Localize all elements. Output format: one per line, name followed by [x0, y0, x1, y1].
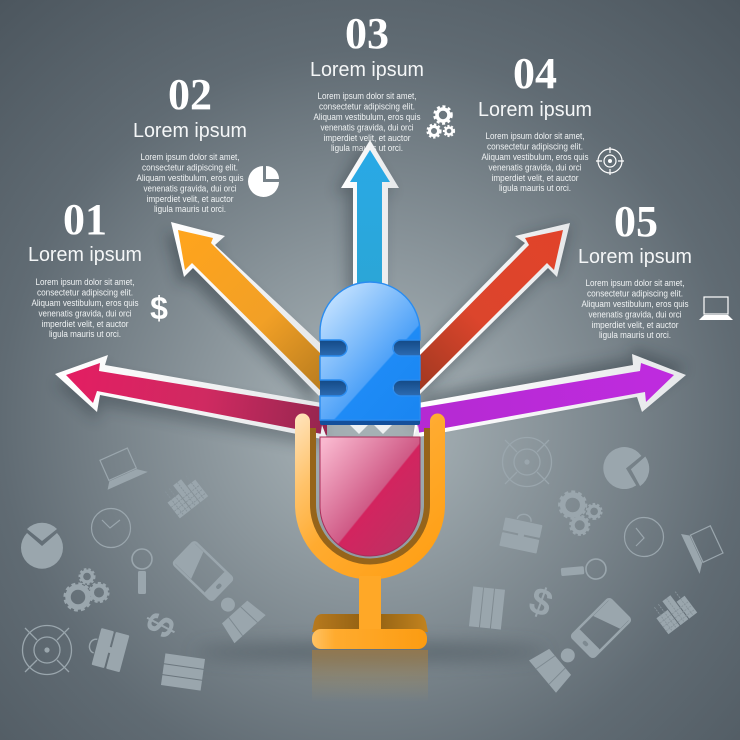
mic: head: [320, 282, 420, 420]
icon: dollar: $: [138, 606, 185, 645]
text block 03: consectetur adipiscing elit.: [319, 102, 415, 112]
mic: base: [312, 629, 427, 649]
icon: gears: [558, 489, 604, 537]
text block 01: venenatis gravida, dui orci: [38, 308, 132, 320]
icon: magnifier: [560, 558, 607, 582]
text block 05: imperdiet velit, et auctor: [592, 320, 679, 331]
text block 02: imperdiet velit, et auctor: [146, 194, 234, 205]
arrow 01: pink: [55, 355, 327, 448]
icon: gears: [65, 569, 108, 610]
arrow 05: purple: [413, 346, 686, 438]
text block 04: 04: [513, 49, 557, 98]
icon: briefcase: [85, 626, 129, 672]
text block 04: imperdiet velit, et auctor: [492, 173, 579, 184]
arrow 02: orange: [166, 222, 322, 407]
text block 03: ligula mauris ut orci.: [331, 143, 403, 154]
text block 02: venenatis gravida, dui orci: [144, 184, 236, 194]
text block 04: Lorem ipsum dolor sit amet,: [486, 131, 584, 142]
icon: pie chart: [21, 523, 63, 569]
text block 01: imperdiet velit, et auctor: [42, 319, 129, 330]
icon: white target: [596, 147, 624, 175]
icon: white gears: [427, 106, 454, 138]
text block 02: consectetur adipiscing elit.: [142, 162, 238, 174]
microphone: [302, 282, 438, 702]
icon: folders: [469, 586, 505, 630]
faint background icons: left cluster: [21, 444, 266, 691]
floor shadow band: [195, 643, 545, 661]
text block 02: Lorem ipsum dolor sit amet,: [140, 152, 240, 163]
text block 04: venenatis gravida, dui orci: [488, 162, 582, 174]
icon: target: [502, 438, 552, 486]
text block 03: venenatis gravida, dui orci: [320, 122, 414, 134]
mic: capsule gap markers: [320, 425, 420, 438]
icon: laptop: [95, 444, 148, 490]
mic: yoke inner shade: [312, 428, 428, 562]
text block 05: consectetur adipiscing elit.: [587, 288, 683, 300]
text block 01: Lorem ipsum dolor sit amet,: [36, 277, 134, 288]
icon: white dollar: $: [150, 290, 168, 326]
icon: dollar: $: [524, 579, 558, 626]
mic: yoke: [302, 421, 438, 572]
text block 01: 01: [63, 195, 107, 244]
text block 02: Aliquam vestibulum, eros quis: [136, 173, 244, 184]
icon: laptop: [681, 521, 727, 574]
arrow 04: red: [417, 223, 570, 399]
text block 05: Aliquam vestibulum, eros quis: [582, 299, 689, 310]
text block 05: Lorem ipsum: [578, 246, 692, 268]
text block 03: Lorem ipsum dolor sit amet,: [318, 91, 416, 102]
text block 04: consectetur adipiscing elit.: [487, 142, 583, 152]
text block 05: 05: [614, 197, 658, 246]
text block 03: Lorem ipsum: [310, 59, 424, 81]
faint background icons: right cluster: [469, 438, 727, 693]
text block 05: venenatis gravida, dui orci: [588, 310, 682, 320]
icon: person: [208, 585, 266, 643]
icon: person: [529, 635, 587, 693]
mic: head lower edge: [320, 415, 420, 425]
icon: tablet: [571, 598, 631, 658]
text block 01: consectetur adipiscing elit.: [37, 288, 133, 298]
text block 03: [310, 9, 424, 154]
mic: body: [320, 437, 420, 556]
icon: buildings: [161, 473, 208, 518]
mic: stem: [359, 576, 381, 632]
text block 05: Lorem ipsum dolor sit amet,: [586, 278, 684, 289]
icon: folders: [161, 653, 205, 691]
icon: clock: [624, 518, 664, 556]
arrow 03: blue: [335, 140, 399, 295]
icon: target: [22, 626, 72, 674]
text block 01: [28, 195, 142, 340]
icon: pie chart: [600, 444, 653, 493]
text block 02: ligula mauris ut orci.: [154, 204, 226, 215]
icon: white laptop: [699, 297, 733, 320]
text block 04: [478, 49, 592, 194]
text block 01: Lorem ipsum: [28, 244, 142, 266]
mic: head notch shadows: [320, 340, 420, 396]
text block 02: [133, 70, 247, 215]
text block 04: ligula mauris ut orci.: [499, 183, 571, 194]
text block 02: Lorem ipsum: [133, 120, 247, 142]
mic: base back face: [312, 614, 428, 632]
icon: buildings: [650, 589, 697, 634]
text block 04: Lorem ipsum: [478, 99, 592, 121]
text block 02: 02: [168, 70, 212, 119]
icon: magnifier: [132, 549, 152, 594]
icon: tablet: [173, 541, 233, 601]
text block 01: ligula mauris ut orci.: [49, 329, 121, 340]
text block 05: ligula mauris ut orci.: [599, 330, 671, 341]
icon: clock: [92, 508, 130, 548]
text block 03: 03: [345, 9, 389, 58]
icon: briefcase: [499, 511, 544, 554]
icon: white pie chart: [248, 166, 279, 197]
text block 04: Aliquam vestibulum, eros quis: [482, 152, 589, 163]
text block 01: Aliquam vestibulum, eros quis: [32, 298, 139, 309]
text block 03: Aliquam vestibulum, eros quis: [314, 112, 421, 123]
text block 05: [578, 197, 692, 341]
mic: reflection: [312, 650, 428, 702]
text block 03: imperdiet velit, et auctor: [324, 133, 411, 144]
